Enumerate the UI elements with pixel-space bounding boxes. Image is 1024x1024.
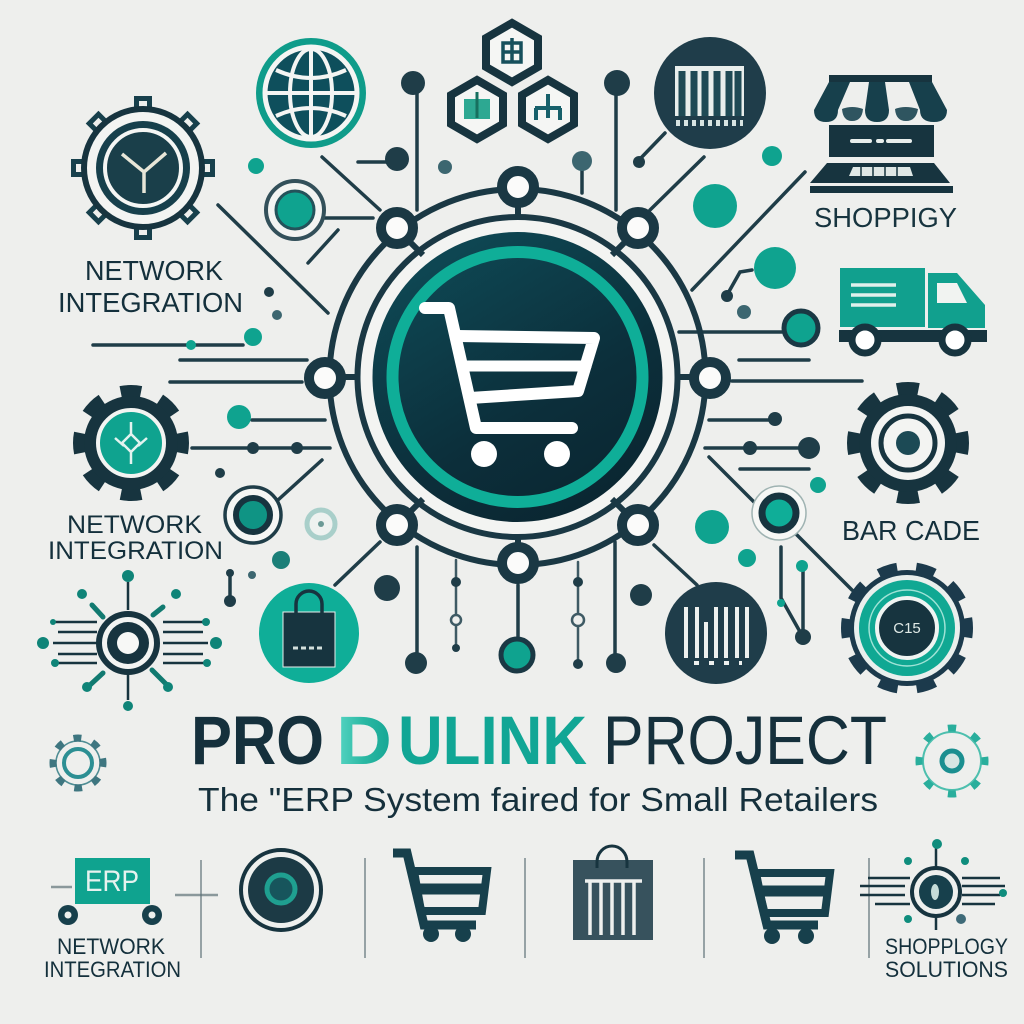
icon: small gear left of title — [53, 738, 103, 788]
icon: shopping bag — [259, 583, 359, 683]
gear teeth — [71, 96, 215, 240]
label: network integration middle: INTEGRATION — [48, 537, 223, 565]
icon: erp cart — [51, 858, 218, 925]
icon: bottom cart 2 — [735, 855, 830, 944]
hexagon top — [486, 23, 538, 82]
label: network integration middle: NETWORK — [67, 511, 202, 539]
label: network integration bottom — [44, 934, 181, 982]
icon: barcode disc top — [654, 37, 766, 149]
label: network integration top: NETWORK — [85, 255, 223, 286]
icon: storefront — [810, 75, 953, 193]
icon: bottom cart 1 — [393, 853, 487, 942]
label: shopplogy solutions: SHOPPLOGY — [885, 934, 1008, 959]
icon: three hexagon modules — [451, 23, 574, 139]
icon: teal ring node right — [752, 486, 806, 540]
icon: small gear right of title — [919, 728, 985, 794]
inner ring — [358, 217, 678, 537]
icon: gear right middle — [854, 389, 962, 497]
icon: gear left middle — [79, 391, 183, 495]
network connector lines — [93, 85, 862, 660]
icon: delivery truck — [839, 268, 987, 353]
icon: barcode disc bottom — [665, 582, 767, 684]
label: network integration middle — [48, 511, 223, 565]
icon: gear top left — [71, 96, 215, 240]
icon: teal node ring top left — [266, 181, 324, 239]
bottom dividers — [201, 858, 869, 958]
icon: radial node bottom right — [860, 839, 1007, 930]
hexagon right — [522, 80, 574, 139]
label: shopplogy solutions — [885, 934, 1008, 982]
icon: globe — [256, 38, 366, 148]
hexagon left — [451, 80, 503, 139]
title: D — [336, 702, 392, 779]
label: shopplogy solutions: SOLUTIONS — [885, 957, 1008, 982]
icon: gear lower right teal — [846, 567, 968, 689]
label: network integration bottom: INTEGRATION — [44, 957, 181, 982]
small network dots — [186, 70, 826, 674]
bottom row icons — [44, 839, 1008, 982]
hub stubs — [343, 200, 692, 556]
subtitle: The "ERP System faired for Small Retailers — [198, 781, 878, 818]
label: network integration top: INTEGRATION — [58, 287, 243, 318]
icon: lens disc — [241, 850, 321, 930]
outer ring — [330, 189, 706, 565]
hub nodes — [309, 171, 726, 579]
label: network integration top — [58, 255, 243, 318]
icon: pale ring — [307, 510, 335, 538]
title — [191, 702, 887, 779]
icon: shopping cart — [425, 308, 594, 467]
label: shoppigy: SHOPPIGY — [814, 202, 957, 233]
label: bar cade: BAR CADE — [842, 515, 980, 546]
central hub — [309, 171, 726, 579]
icon: barcode bag — [573, 846, 653, 940]
icon: radial node left — [37, 570, 222, 711]
title: PROJECT — [603, 702, 887, 779]
label: network integration bottom: NETWORK — [57, 934, 165, 959]
title: ULINK — [398, 702, 587, 779]
icon: erp cart: ERP — [85, 865, 139, 898]
teal ring — [392, 252, 642, 502]
icon: gear lower right teal: C15 — [893, 620, 921, 637]
icon: ring node lower left — [225, 487, 281, 543]
dark disc — [372, 232, 662, 522]
title: PRO — [191, 702, 324, 779]
